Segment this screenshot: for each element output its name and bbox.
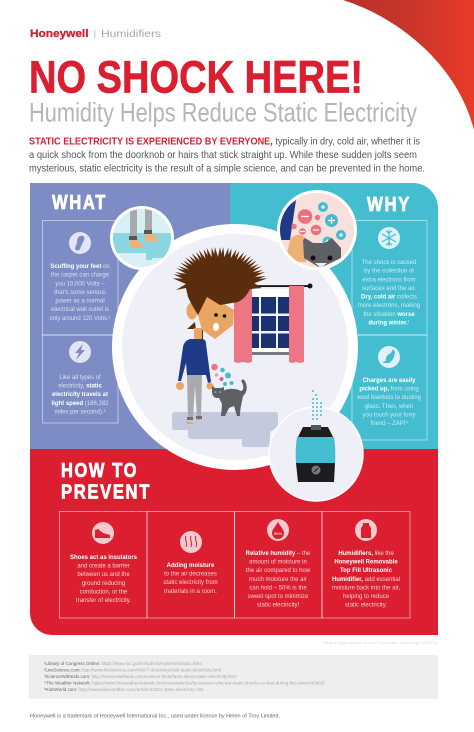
sources panel xyxy=(29,655,438,699)
text: scuffing xyxy=(49,264,111,322)
text: light speed: miles per second).² xyxy=(54,409,106,415)
text: shoes: ground reducing xyxy=(82,581,125,587)
decorative corner swoosh xyxy=(343,0,474,130)
text: shock cause: more electrons, making xyxy=(358,303,420,309)
heading: how to prevent: PREVENT xyxy=(61,480,151,504)
panel: what xyxy=(42,191,118,423)
trademark line: Honeywell is a trademark of Honeywell International Inc., used under license by Helen of Troy Limited. xyxy=(30,714,280,720)
text: relative humidity: static electricity! xyxy=(257,603,300,609)
sources panel: ³ScienceWithKids.com: http://sciencewithkids.com/science-facts/facts-about-static-electricity.html xyxy=(44,674,236,679)
text: humidifiers: helping to reduce xyxy=(343,594,390,600)
icon: lightning xyxy=(69,341,91,363)
icon: foot xyxy=(69,232,91,254)
text: shoes xyxy=(70,555,138,604)
heading: how to prevent xyxy=(61,459,151,504)
text: moisture: static electricity from xyxy=(163,580,218,586)
sources panel: ²LiveScience.com: http://www.livescience.com/49077-shocking-truth-static-electricity.html xyxy=(44,668,221,672)
text: light speed: light speed (186,282 xyxy=(51,401,109,407)
text: humidifiers: Honeywell Removable xyxy=(334,560,398,566)
text: light speed: electricity travels at xyxy=(52,392,108,398)
circle: feet on carpet xyxy=(110,205,175,270)
text: shoes: conduction, or the xyxy=(80,589,128,595)
text: scuffing: that’s some serious xyxy=(54,290,106,296)
text: humidifiers: Humidifier, add essential xyxy=(332,577,400,583)
text: scuffing: the carpet can charge xyxy=(51,273,110,279)
text: light speed: electricity, static xyxy=(58,384,102,390)
text: charges: friend – ZAP!³ xyxy=(370,421,408,427)
panel: why xyxy=(352,193,427,440)
text: relative humidity: much moisture the air xyxy=(249,577,307,583)
text: scuffing: Scuffing your feet on xyxy=(50,264,110,270)
text: shock cause: by the collection of xyxy=(364,269,414,275)
heading: what: WHAT xyxy=(52,191,107,214)
central illustration xyxy=(112,224,358,470)
intro text xyxy=(29,136,425,174)
intro text: a quick shock from the doorknob or hairs that stick straight up. While these sudden jolts seem xyxy=(29,150,417,161)
text: moisture: materials in a room. xyxy=(164,589,217,595)
text: relative humidity: can hold – 50% is the xyxy=(249,585,307,591)
floor shadow xyxy=(172,412,278,447)
text: humidifiers: moisture back into the air, xyxy=(332,585,401,591)
heading: how to prevent: HOW TO xyxy=(61,459,138,482)
text: shoes: and create a barrier xyxy=(77,564,130,570)
brand logo: Honeywell xyxy=(30,28,88,40)
icon: humidity drop xyxy=(267,519,289,541)
text: moisture xyxy=(163,563,218,595)
panel: how to prevent xyxy=(60,459,410,618)
sources panel: ¹Library of Congress Online: https://www.loc.gov/rr/scitech/mysteries/static.html xyxy=(44,661,202,666)
text: scuffing: electrical wall outlet is xyxy=(51,307,109,313)
text: humidifiers: Top Fill Ultrasonic xyxy=(340,568,393,574)
text: moisture: to the air decreases xyxy=(164,572,217,578)
text: relative humidity xyxy=(246,551,311,609)
title: NO SHOCK HERE! xyxy=(29,52,363,102)
text: light speed: Like all types of xyxy=(59,375,101,381)
text: shoes: between us and the xyxy=(77,572,130,578)
heading: why: WHY xyxy=(367,193,411,216)
text: relative humidity: the air compared to how xyxy=(246,568,311,574)
text: shoes: Shoes act as insulators xyxy=(70,555,138,561)
text: shock cause: The shock is caused xyxy=(362,260,416,266)
text: shoes: transfer of electricity. xyxy=(76,598,131,604)
brand logo xyxy=(30,28,161,40)
icon: humidity drop: 50% xyxy=(274,531,282,536)
icon: cat xyxy=(378,346,400,368)
person xyxy=(172,243,268,424)
window xyxy=(234,284,312,363)
intro text: STATIC ELECTRICITY IS EXPERIENCED BY EVERYONE, typically in dry, cold air, whether it is xyxy=(29,136,420,148)
humidifier body xyxy=(298,427,333,437)
text: shock cause: extra electrons from xyxy=(362,277,416,283)
text: humidifiers xyxy=(332,551,401,609)
text: relative humidity: sweet spot to minimize xyxy=(248,594,309,600)
icon: snowflake xyxy=(378,227,400,249)
circle: cat charges xyxy=(276,190,357,270)
copyright note: ©2018 All rights reserved. Helen of Troy Limited, Marlborough, MA 01752 xyxy=(321,641,438,645)
static particles xyxy=(211,364,234,386)
text: scuffing: you 10,000 Volts – xyxy=(55,281,105,287)
text: charges: wool blankets to dusting xyxy=(356,395,421,401)
text: charges xyxy=(356,378,421,427)
text: shock cause xyxy=(358,260,420,326)
humidifier mist xyxy=(312,390,322,420)
brand logo: Humidifiers xyxy=(101,28,161,40)
text: humidifiers: Humidifiers, like the xyxy=(338,551,394,557)
icon: shoe xyxy=(92,522,114,544)
sources panel: ⁵KidsWorld.com: http://www.kidsworldfun.com/article/22301-static-electricity-101 xyxy=(44,687,204,692)
text: charges: you touch your furry xyxy=(362,412,416,418)
icon: humidifier xyxy=(355,519,377,541)
text: charges: picked up, from using xyxy=(359,387,419,393)
text: shock cause: during winter.¹ xyxy=(368,320,410,326)
circle: humidifier xyxy=(269,390,363,501)
text: shock cause: surfaces and the air. xyxy=(362,286,416,292)
text: moisture: Adding moisture xyxy=(167,563,215,569)
spiky hair xyxy=(172,243,268,315)
text: scuffing: power as a normal xyxy=(55,299,105,305)
text: humidifiers: static electricity. xyxy=(345,603,387,609)
text: charges: Charges are easily xyxy=(362,378,416,384)
text: shock cause: the situation worse xyxy=(363,312,415,318)
icon: steam xyxy=(180,531,202,553)
sources panel: ⁴The Weather Network: https://www.theweathernetwork.com/news/articles/fyi-science-why-are-static-shocks-so-bad-during-the-winter/45962/ xyxy=(44,680,325,686)
text: light speed xyxy=(51,375,109,415)
intro text: mysterious, static electricity is the result of a simple science, and can be prevented in the home. xyxy=(29,164,425,174)
cat xyxy=(212,379,247,416)
panel: background xyxy=(30,183,438,635)
text: scuffing: only around 120 Volts.¹ xyxy=(49,316,111,322)
text: shock cause: Dry, cold air collects xyxy=(361,295,417,301)
text: charges: glass. Then, when xyxy=(365,404,413,410)
text: relative humidity: Relative humidity – the xyxy=(246,551,311,557)
text: relative humidity: amount of moisture in xyxy=(249,560,307,566)
